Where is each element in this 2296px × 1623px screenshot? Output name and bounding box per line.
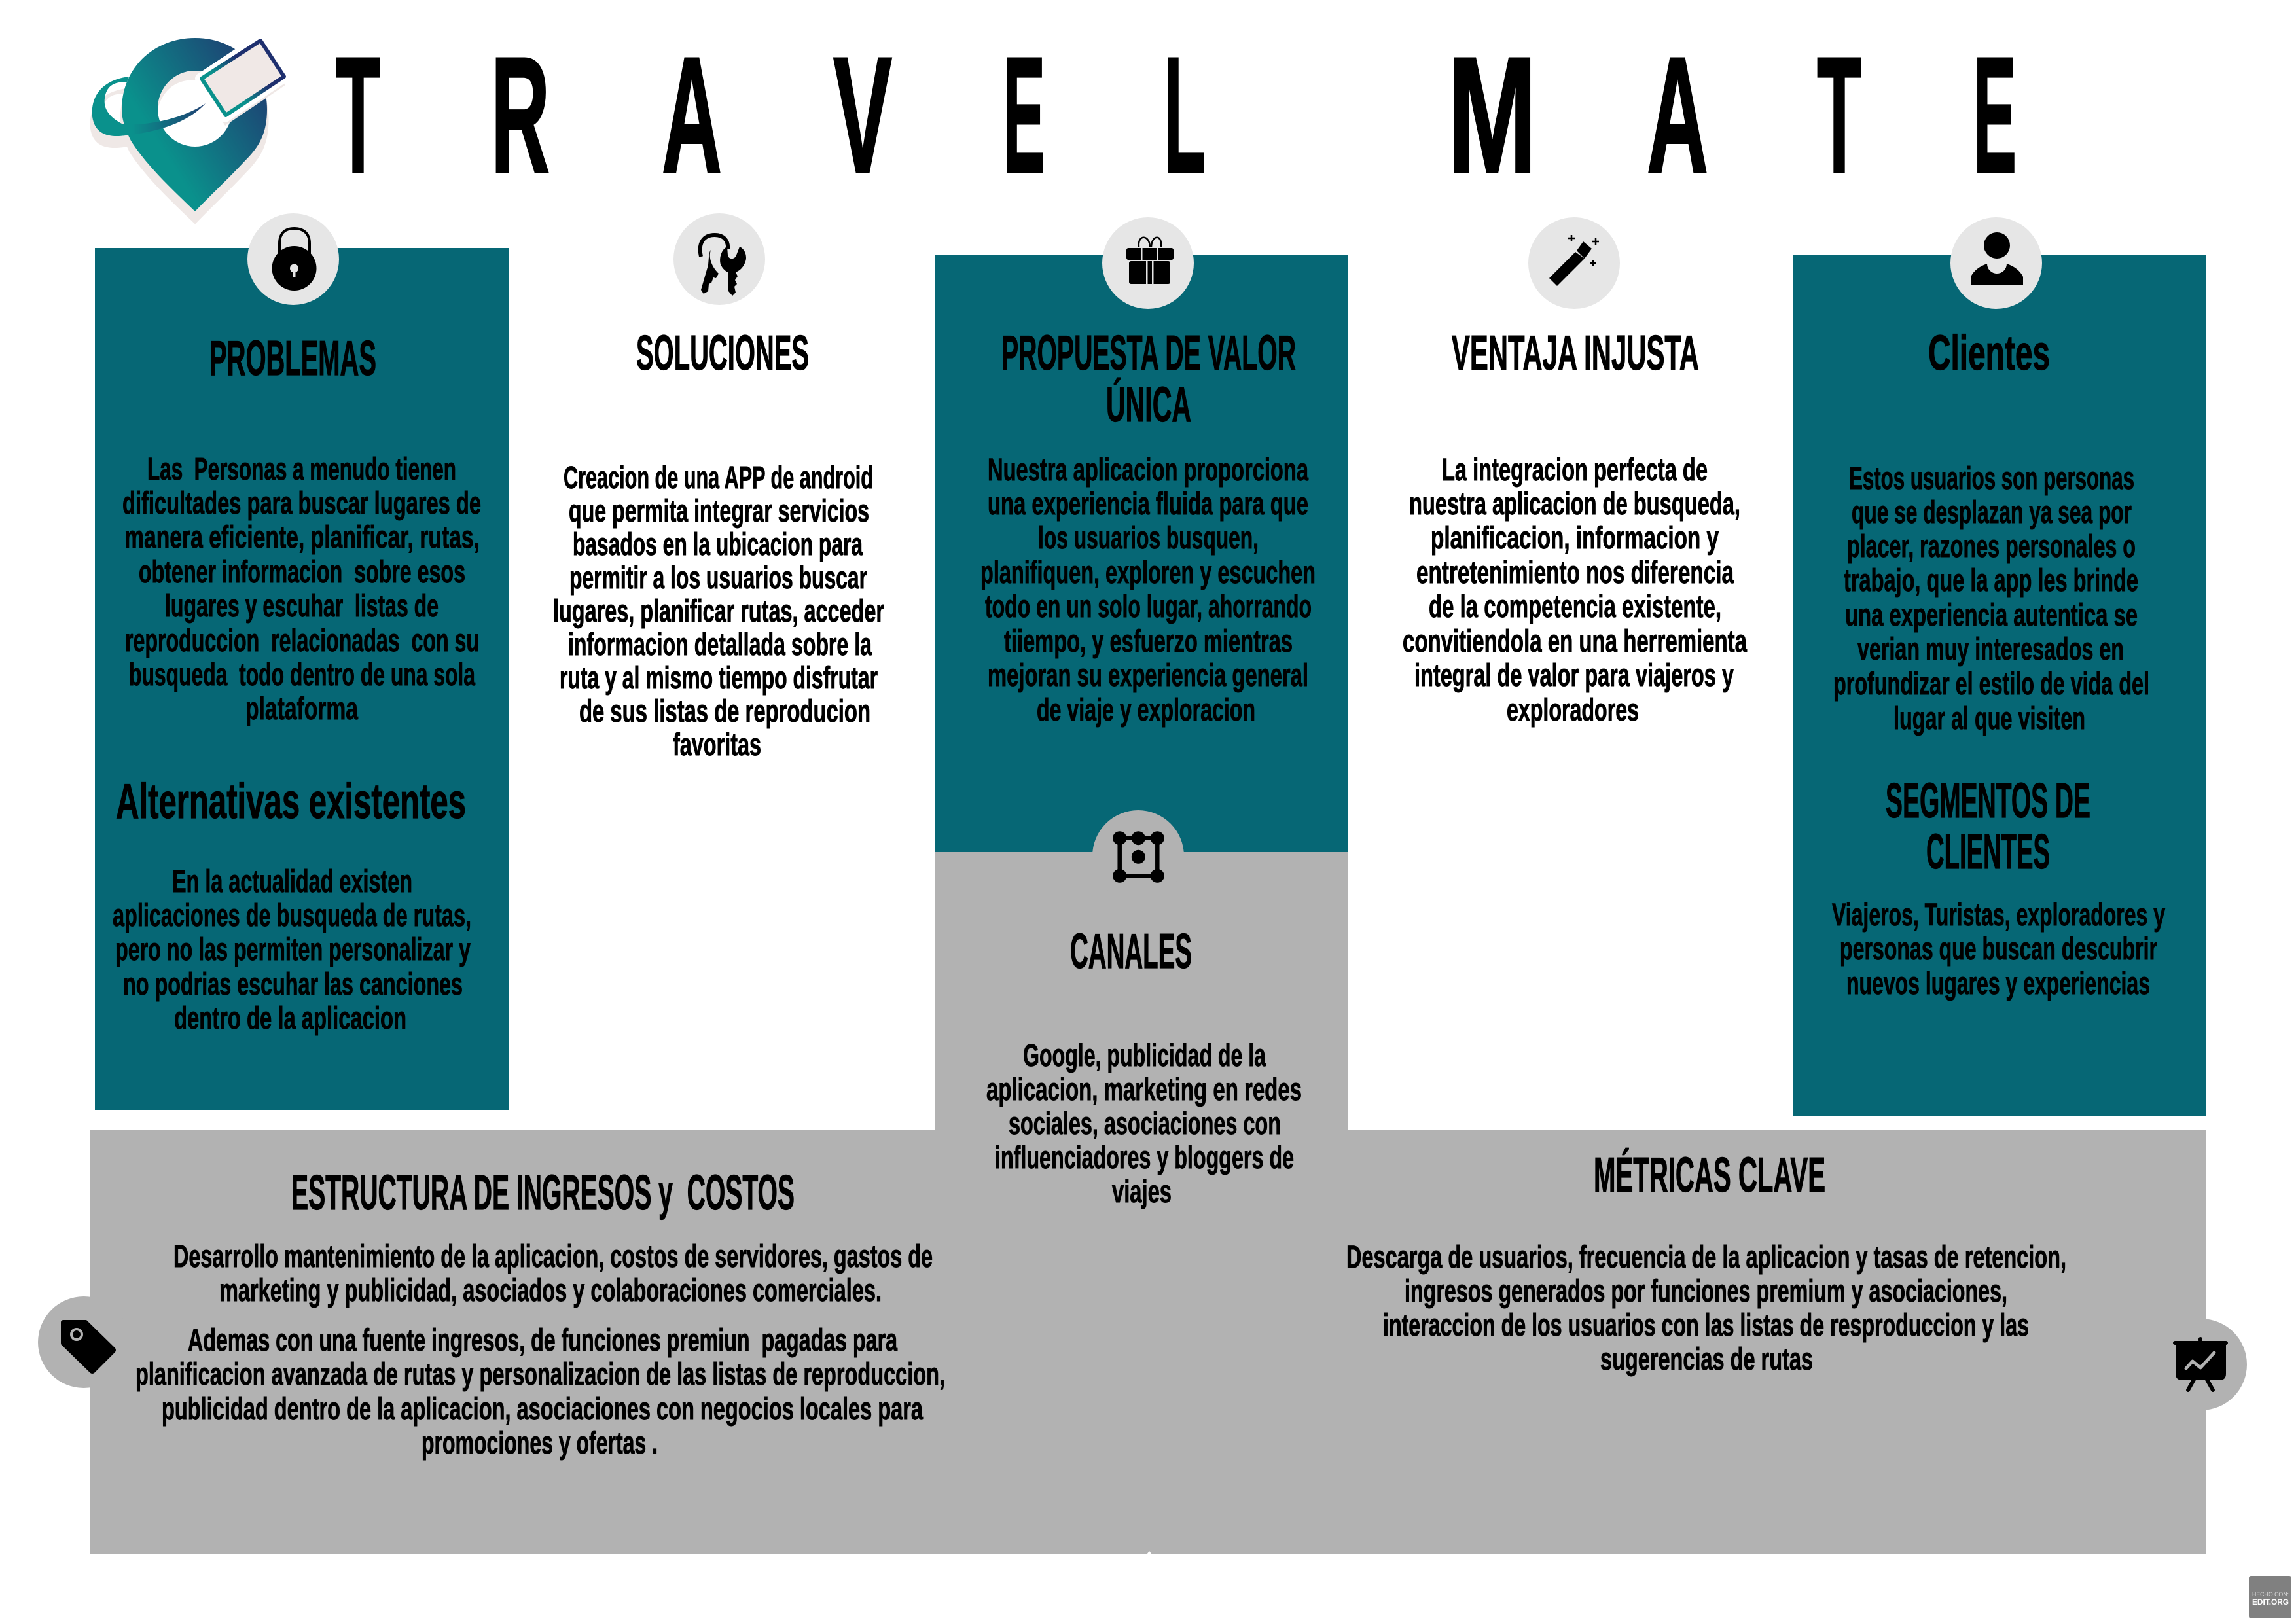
- text: alternativas body: aplicaciones de busqueda de rutas,: [113, 899, 471, 933]
- title: TRAVEL MATE: V: [833, 22, 892, 207]
- text: segmentos body: [1832, 898, 2165, 1001]
- text: problemas body: obtener informacion sobre esos: [139, 555, 465, 590]
- icon: keys: [673, 213, 765, 305]
- heading: segmentos de clientes: SEGMENTOS DE: [1886, 773, 2090, 828]
- heading: clientes: Clientes: [1928, 325, 2050, 380]
- text: problemas body: Las Personas a menudo tienen: [147, 452, 456, 487]
- title: TRAVEL MATE: R: [491, 22, 550, 207]
- text: ventaja body: convitiendola en una herremienta: [1403, 624, 1747, 659]
- icon: canales network: [1092, 810, 1184, 902]
- panel: clientes background: [1793, 255, 2206, 1116]
- text: metricas body: sugerencias de rutas: [1600, 1342, 1813, 1377]
- heading: canales: CANALES: [1070, 923, 1192, 978]
- panel: canales background: [935, 852, 1348, 1133]
- text: canales body: [986, 1039, 1302, 1209]
- title: TRAVEL MATE: A: [1647, 22, 1708, 207]
- heading: estructura de ingresos y costos: ESTRUCTURA DE INGRESOS y COSTOS: [291, 1165, 795, 1220]
- notch at bottom edge of grey panel: [1147, 1551, 1152, 1554]
- text: ventaja body: planificacion, informacion y: [1431, 521, 1719, 556]
- text: canales body: influenciadores y bloggers de: [995, 1141, 1294, 1175]
- text: canales body: Google, publicidad de la: [1023, 1039, 1266, 1073]
- heading: ventaja injusta: VENTAJA INJUSTA: [1452, 325, 1699, 380]
- text: ventaja body: nuestra aplicacion de busqueda,: [1409, 487, 1740, 522]
- icon: price tag: [38, 1296, 130, 1388]
- text: canales body: sociales, asociaciones con: [1009, 1107, 1281, 1141]
- icon: gift: [1102, 217, 1194, 309]
- text: soluciones body: favoritas: [673, 728, 761, 762]
- text: ventaja body: entretenimiento nos diferencia: [1416, 556, 1734, 590]
- text: propuesta body: de viaje y exploracion: [1037, 693, 1255, 728]
- title: TRAVEL MATE: E: [1003, 22, 1045, 207]
- text: soluciones body: que permita integrar servicios: [569, 494, 869, 529]
- text: problemas body: lugares y escuhar listas de: [165, 589, 439, 624]
- icon: lock: [247, 213, 339, 305]
- icon: magic wand: [1528, 217, 1620, 309]
- title: TRAVEL MATE: T: [336, 22, 380, 207]
- text: alternativas body: pero no las permiten personalizar y: [115, 933, 471, 967]
- text: metricas body: ingresos generados por funciones premium y asociaciones,: [1405, 1274, 2007, 1309]
- text: clientes body: lugar al que visiten: [1893, 702, 2085, 736]
- text: propuesta body: mejoran su experiencia general: [988, 658, 1308, 693]
- text: estructura body: planificacion avanzada de rutas y personalizacion de las listas de reproduccion,: [135, 1357, 945, 1392]
- text: clientes body: profundizar el estilo de vida del: [1833, 667, 2149, 702]
- text: propuesta body: todo en un solo lugar, ahorrando: [985, 590, 1312, 624]
- text: soluciones body: de sus listas de reproducion: [579, 694, 870, 729]
- badge: hecho con edit.org: HECHO CON:: [2252, 1591, 2289, 1597]
- text: propuesta body: una experiencia fluida para que: [988, 487, 1308, 522]
- text: propuesta body: Nuestra aplicacion proporciona: [988, 453, 1308, 488]
- title: TRAVEL MATE: L: [1164, 22, 1206, 207]
- text: problemas body: plataforma: [245, 692, 358, 726]
- text: clientes body: placer, razones personales o: [1847, 529, 2136, 564]
- title: TRAVEL MATE: A: [662, 22, 722, 207]
- text: ventaja body: [1403, 453, 1747, 728]
- heading: propuesta de valor unica: [1001, 325, 1296, 432]
- text: estructura body: [135, 1240, 945, 1461]
- text: propuesta body: tiiempo, y esfuerzo mientras: [1004, 624, 1293, 659]
- panel: propuesta de valor background: [935, 255, 1348, 852]
- panel: problemas background: [95, 248, 509, 1110]
- text: propuesta body: planifiquen, exploren y escuchen: [980, 556, 1316, 590]
- text: soluciones body: informacion detallada sobre la: [568, 628, 872, 662]
- text: problemas body: reproduccion relacionadas con su: [125, 624, 479, 658]
- heading: alternativas existentes: Alternativas existentes: [116, 774, 466, 829]
- text: clientes body: trabajo, que la app les brinde: [1844, 563, 2138, 598]
- text: segmentos body: nuevos lugares y experiencias: [1846, 967, 2150, 1001]
- text: alternativas body: [113, 865, 471, 1036]
- panel: estructura and metricas base: [90, 1130, 2206, 1554]
- heading: segmentos de clientes: CLIENTES: [1926, 824, 2050, 879]
- text: soluciones body: lugares, planificar rutas, acceder: [553, 594, 884, 629]
- text: canales body: aplicacion, marketing en redes: [986, 1073, 1302, 1107]
- text: canales body: viajes: [1112, 1175, 1172, 1209]
- text: estructura body: Ademas con una fuente ingresos, de funciones premiun pagadas para: [188, 1323, 897, 1358]
- text: problemas body: manera eficiente, planificar, rutas,: [124, 520, 480, 555]
- text: soluciones body: [553, 461, 884, 762]
- text: ventaja body: integral de valor para viajeros y: [1414, 658, 1734, 693]
- text: problemas body: [122, 452, 481, 726]
- title: TRAVEL MATE: [336, 22, 2017, 207]
- text: propuesta body: los usuarios busquen,: [1038, 521, 1259, 556]
- heading: metricas clave: MÉTRICAS CLAVE: [1594, 1147, 1825, 1202]
- logo: map pin with luggage tag: [90, 38, 285, 222]
- text: soluciones body: Creacion de una APP de android: [564, 461, 873, 495]
- text: propuesta body: [980, 453, 1316, 728]
- badge: hecho con edit.org: [2249, 1576, 2291, 1618]
- heading: propuesta de valor unica: PROPUESTA DE VALOR: [1001, 325, 1296, 380]
- text: clientes body: Estos usuarios son personas: [1849, 461, 2134, 496]
- text: soluciones body: basados en la ubicacion para: [573, 527, 863, 562]
- text: ventaja body: La integracion perfecta de: [1442, 453, 1708, 488]
- title: TRAVEL MATE: M: [1448, 22, 1537, 207]
- text: E: [1973, 22, 2017, 207]
- text: clientes body: una experiencia autentica se: [1845, 598, 2138, 633]
- title: TRAVEL MATE: T: [1817, 22, 1861, 207]
- text: ventaja body: exploradores: [1507, 693, 1639, 728]
- heading: propuesta de valor unica: ÚNICA: [1106, 377, 1191, 432]
- badge: hecho con edit.org: EDIT.ORG: [2252, 1597, 2289, 1607]
- text: problemas body: dificultades para buscar lugares de: [122, 486, 481, 521]
- text: ventaja body: de la competencia existente,: [1429, 590, 1721, 624]
- text: metricas body: [1346, 1240, 2066, 1377]
- heading: segmentos de clientes: [1886, 773, 2090, 879]
- text: estructura body: promociones y ofertas .: [422, 1426, 658, 1461]
- text: soluciones body: ruta y al mismo tiempo disfrutar: [560, 661, 878, 696]
- heading: soluciones: SOLUCIONES: [636, 325, 809, 380]
- heading: problemas: PROBLEMAS: [209, 330, 376, 385]
- icon: person: [1950, 217, 2042, 309]
- text: alternativas body: no podrias escuhar las canciones: [123, 967, 463, 1002]
- text: estructura body: marketing y publicidad, asociados y colaboraciones comerciales.: [219, 1274, 882, 1308]
- text: problemas body: busqueda todo dentro de una sola: [129, 658, 475, 692]
- icon: chart presentation: [2155, 1319, 2247, 1410]
- text: alternativas body: dentro de la aplicacion: [174, 1001, 406, 1036]
- text: clientes body: que se desplazan ya sea por: [1852, 495, 2132, 530]
- text: estructura body: Desarrollo mantenimiento de la aplicacion, costos de servidores, gastos de: [173, 1240, 933, 1274]
- text: clientes body: verian muy interesados en: [1857, 632, 2124, 667]
- text: soluciones body: permitir a los usuarios buscar: [569, 561, 867, 596]
- text: alternativas body: En la actualidad existen: [172, 865, 412, 899]
- text: clientes body: [1833, 461, 2149, 736]
- text: estructura body: publicidad dentro de la aplicacion, asociaciones con negocios locales para: [162, 1392, 923, 1427]
